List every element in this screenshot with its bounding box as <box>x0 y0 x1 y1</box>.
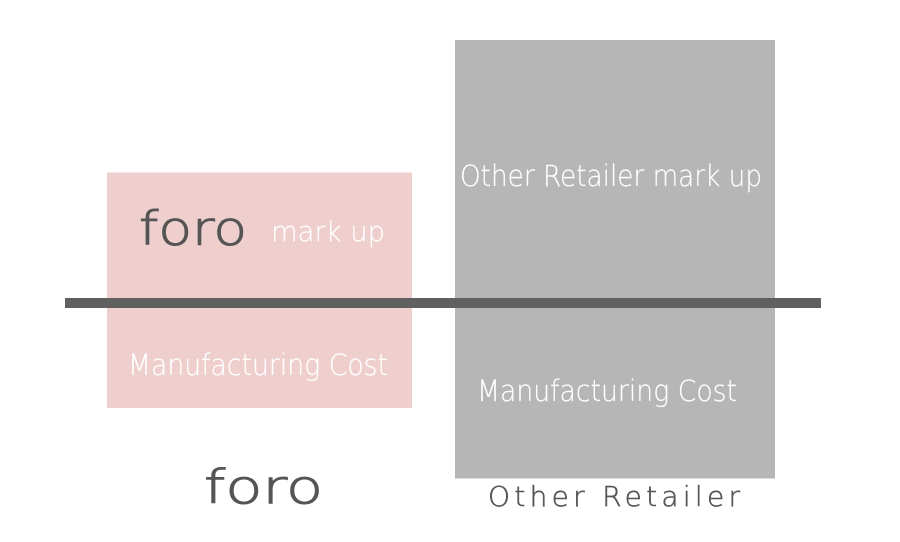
label: foro logo in bar: foro <box>139 202 247 256</box>
baseline: manufacturing cost threshold <box>65 298 821 308</box>
bar: other retailer <box>455 40 775 478</box>
axis label: foro: foro <box>204 460 323 514</box>
bar: foro <box>107 172 412 408</box>
axis label: other retailer: Other Retailer <box>488 480 740 513</box>
label: foro mark up: mark up <box>271 215 385 248</box>
label: other retailer mark up: Other Retailer mark up <box>460 159 762 193</box>
label: foro manufacturing cost: Manufacturing Cost <box>128 348 388 382</box>
label: other retailer manufacturing cost: Manufacturing Cost <box>477 374 737 408</box>
